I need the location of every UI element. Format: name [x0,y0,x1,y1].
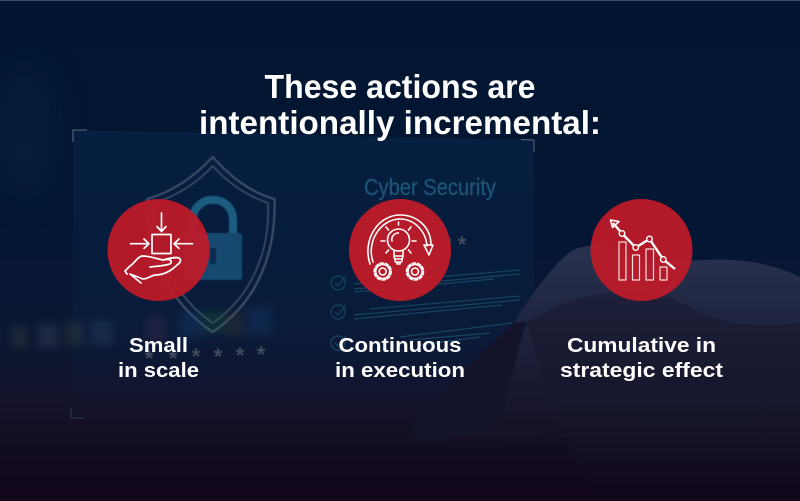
background password stars: * [458,232,467,257]
label: Cumulative in [567,335,716,357]
background password stars [145,232,467,371]
title [199,68,601,141]
label [335,335,465,382]
background password stars: * [214,344,223,369]
label: Continuous [338,335,462,357]
red circle badge [108,199,210,301]
item: continuous in execution [335,199,465,382]
background password stars: * [192,344,201,369]
background left glow [0,60,55,200]
background screen panel [71,130,534,420]
background label: Cyber Security: Cyber Security [364,174,496,200]
background password stars: * [236,343,245,368]
label: in execution [335,360,465,382]
background padlock [184,200,242,280]
background password stars: * [257,342,266,367]
background hand on keyboard [412,245,800,501]
red circle badge [590,199,692,301]
label [560,335,723,382]
icon: light bulb with gears and circular arrow [368,215,433,280]
label: strategic effect [560,360,723,382]
title: These actions are [264,68,536,105]
label: in scale [118,360,199,382]
red circle badge [349,199,451,301]
background password stars: * [145,346,154,371]
background checklist [331,270,520,350]
label [118,335,199,382]
background password stars: * [443,232,452,257]
title: intentionally incremental: [199,104,601,141]
background shield [147,157,275,332]
background password stars: * [169,346,178,371]
item: cumulative in strategic effect [560,199,723,382]
item: small in scale [108,199,210,382]
label: Small [129,335,188,357]
icon: bar chart with trend arrow [610,220,675,280]
icon: arrows into square above open hand [125,213,192,283]
background blurred app icons [11,306,272,348]
